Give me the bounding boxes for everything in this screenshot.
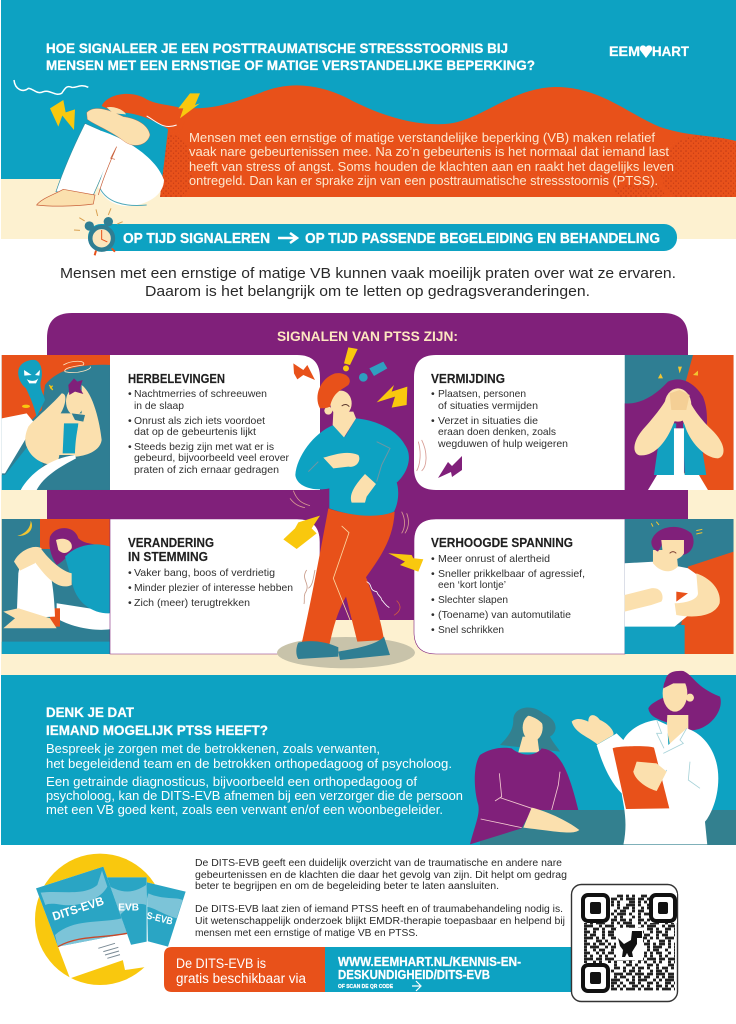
illustration: DITS-EVB booklets: DITS-EVB (51, 894, 106, 924)
doctor (648, 671, 721, 730)
panel: signals background (1, 313, 736, 675)
illustration: distressed man (277, 347, 426, 668)
panel: herbelevingen illustration (2, 355, 110, 490)
card: verhoogde spanning: (Toename) van automutilatie (438, 609, 571, 621)
banner: on time signalling: OP TIJD PASSENDE BEGELEIDING EN BEHANDELING (305, 231, 660, 247)
card: herbelevingen: gebeurd, bijvoorbeeld veel erover (134, 452, 289, 464)
card: verhoogde spanning: • (431, 624, 435, 636)
text block: Denk je dat: DENK JE DAT (46, 704, 134, 720)
banner: availability: DESKUNDIGHEID/DITS-EVB (338, 968, 490, 982)
hands (323, 453, 359, 468)
card: herbelevingen: • (128, 388, 132, 400)
card: herbelevingen: dat op de gebeurtenis lijkt (134, 426, 256, 438)
card: vermijding: Plaatsen, personen (438, 388, 526, 400)
text block: introduction (189, 131, 674, 188)
card: vermijding: eraan doen denken, zoals (438, 426, 556, 438)
card: verandering in stemming: • (128, 567, 132, 579)
icon: alarm clock (74, 208, 123, 255)
text block: Denk je dat: Een getrainde diagnosticus, bijvoorbeeld een orthopedagoog of (46, 775, 418, 789)
card: verhoogde spanning: VERHOOGDE SPANNING (431, 535, 573, 550)
card: herbelevingen: Steeds bezig zijn met wat er is (134, 441, 274, 453)
illustration: sitting woman (14, 80, 200, 206)
card: verandering in stemming: Zich (meer) terugtrekken (134, 597, 250, 609)
hair (317, 373, 350, 408)
yellow circle (35, 854, 165, 985)
card: verhoogde spanning: Meer onrust of alertheid (438, 553, 550, 565)
text block: lead sentence (60, 265, 676, 300)
card: verandering in stemming: IN STEMMING (128, 549, 208, 564)
panel: Denk je dat (1, 675, 736, 845)
card: verhoogde spanning: • (431, 609, 435, 621)
shoes (296, 637, 390, 660)
heading: main title: MENSEN MET EEN ERNSTIGE OF MATIGE VERSTANDELIJKE BEPERKING? (46, 57, 535, 73)
second booklet (105, 877, 148, 970)
card: verhoogde spanning: Snel schrikken (438, 624, 504, 636)
banner: availability: gratis beschikbaar via (176, 971, 306, 986)
finder patterns (581, 893, 677, 994)
text block: introduction: vaak nare gebeurtenissen mee. Na zo’n gebeurtenis is het normaal dat iemand last (189, 145, 670, 159)
banner: availability: OF SCAN DE QR CODE (338, 984, 393, 990)
text block: Denk je dat: met een VB goed kent, zoals een verwant en/of een woonbegeleider. (46, 803, 443, 817)
card: herbelevingen (110, 355, 320, 490)
banner: availability: WWW.EEMHART.NL/KENNIS-EN- (338, 955, 521, 969)
card: verhoogde spanning: • (431, 568, 435, 580)
panel: spanning illustration (625, 519, 734, 654)
card: vermijding: • (431, 388, 435, 400)
card: vermijding: • (431, 415, 435, 427)
trousers (302, 508, 395, 645)
card: herbelevingen: Nachtmerries of schreeuwen (134, 388, 267, 400)
card: verandering in stemming: VERANDERING (128, 535, 214, 550)
logo: Eemhart: EEM (609, 43, 640, 59)
text block: introduction: ontregeld. Dan kan er sprake zijn van een posttraumatische stressstoornis (PTSS). (189, 174, 658, 188)
card: verhoogde spanning: Slechter slapen (438, 594, 508, 606)
card: herbelevingen: • (128, 441, 132, 453)
card: vermijding (414, 355, 625, 490)
card: herbelevingen: Onrust als zich iets voordoet (134, 415, 265, 427)
text block: DITS-EVB description: Uit wetenschappelijk onderzoek blijkt EMDR-therapie toepasbaar en helpend bij (195, 916, 565, 927)
shadow under feet (277, 637, 415, 668)
text block: DITS-EVB description: gebeurtenissen en de klachten die daar het gevolg van zijn. Dit helpt om gedrag (195, 870, 567, 881)
illustration: DITS-EVB booklets: EVB (118, 903, 139, 914)
logo: Eemhart: HART (652, 43, 689, 59)
card: vermijding: wegduwen of hulp weigeren (437, 438, 568, 450)
heading: main title: HOE SIGNALEER JE EEN POSTTRAUMATISCHE STRESSSTOORNIS BIJ (46, 40, 508, 56)
card: verandering in stemming: Minder plezier of interesse hebben (134, 582, 293, 594)
text block: DITS-EVB description: De DITS-EVB laat zien of iemand PTSS heeft en of traumabehandeling nodig is. (195, 904, 563, 915)
heading: signals: SIGNALEN VAN PTSS ZIJN: (277, 329, 458, 344)
card: vermijding: VERMIJDING (431, 371, 505, 386)
card: verandering in stemming (110, 519, 320, 654)
sweater (295, 418, 409, 516)
text block: DITS-EVB description: De DITS-EVB geeft een duidelijk overzicht van de traumatische en andere nare (195, 858, 562, 869)
banner: on time signalling (88, 224, 677, 251)
card: verhoogde spanning: een ‘kort lontje’ (438, 579, 506, 591)
text block: lead sentence: Mensen met een ernstige of matige VB kunnen vaak moeilijk praten over wat ze ervaren. (60, 265, 676, 282)
text block: Denk je dat: het begeleidend team en de betrokken orthopedagoog of psycholoog. (46, 757, 452, 771)
QR code (572, 884, 678, 1002)
card: verhoogde spanning: • (431, 594, 435, 606)
card: vermijding: Verzet in situaties die (438, 415, 538, 427)
card: herbelevingen: HERBELEVINGEN (128, 371, 225, 386)
panel: vermijding illustration (625, 355, 734, 490)
panel: header background (1, 0, 736, 239)
panel: orange wave (152, 85, 736, 205)
card: verhoogde spanning: • (431, 553, 435, 565)
text block: Denk je dat: IEMAND MOGELIJK PTSS HEEFT? (46, 722, 268, 738)
banner: availability: De DITS-EVB is (176, 956, 266, 971)
card: verandering in stemming: • (128, 597, 132, 609)
banner: on time signalling: OP TIJD SIGNALEREN (123, 231, 270, 247)
heading: main title (46, 40, 535, 73)
third booklet (125, 882, 186, 966)
card: verandering in stemming: Vaker bang, boos of verdrietig (134, 567, 275, 579)
bolts (293, 363, 315, 380)
card: vermijding: of situaties vermijden (438, 400, 538, 412)
card: herbelevingen: • (128, 415, 132, 427)
text block: introduction: heeft van stress of angst. Soms houden de klachten aan en raakt het dagelijks leven (189, 160, 674, 174)
dinosaur (616, 928, 643, 960)
card: verhoogde spanning: Sneller prikkelbaar of agressief, (438, 568, 585, 580)
card: herbelevingen: in de slaap (134, 400, 184, 412)
text block: Denk je dat: Bespreek je zorgen met de betrokkenen, zoals verwanten, (46, 742, 380, 756)
illustration: DITS-EVB booklets (35, 854, 186, 985)
icon: purple bolt (438, 456, 462, 478)
card: herbelevingen: praten of zich ernaar gedragen (134, 464, 279, 476)
exclamation and symbols (344, 347, 358, 365)
text block: DITS-EVB description: mensen met een ernstige of matige VB en PTSS. (195, 928, 418, 939)
text block: DITS-EVB description (195, 858, 567, 939)
card: verhoogde spanning (414, 519, 625, 654)
logo: Eemhart (609, 43, 689, 59)
banner: availability (164, 947, 575, 992)
client (500, 708, 560, 752)
text block: lead sentence: Daarom is het belangrijk om te letten op gedragsveranderingen. (145, 283, 590, 300)
illustration: client and doctor (470, 671, 721, 845)
panel: stemming illustration (2, 519, 110, 654)
movement lines (290, 440, 426, 533)
neck and face (333, 412, 356, 437)
main booklet (36, 867, 135, 978)
text block: Denk je dat (46, 704, 463, 817)
text block: introduction: Mensen met een ernstige of matige verstandelijke beperking (VB) maken relatief (189, 131, 656, 145)
illustration: DITS-EVB booklets: S-EVB (145, 911, 174, 928)
text block: DITS-EVB description: beter te begrijpen en om de begeleiding beter te laten aansluiten. (195, 881, 499, 892)
card: verandering in stemming: • (128, 582, 132, 594)
text block: Denk je dat: psycholoog, kan de DITS-EVB afnemen bij een verzorger die de persoon (46, 789, 463, 803)
